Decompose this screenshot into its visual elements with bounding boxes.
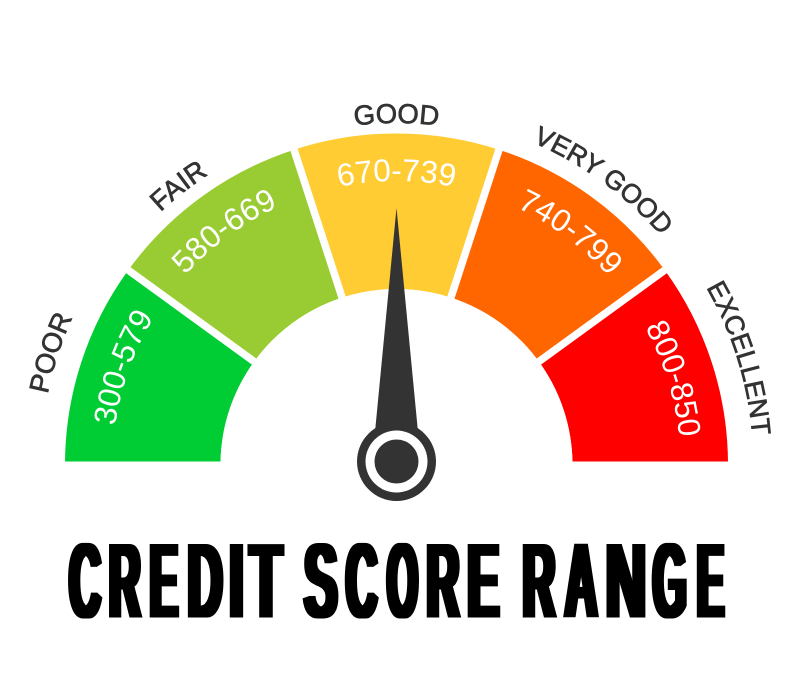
label: very good: VERY GOOD xyxy=(539,125,671,232)
text: E xyxy=(697,520,724,640)
gauge needle and hub xyxy=(357,208,436,501)
title: D xyxy=(188,520,222,640)
title xyxy=(69,520,724,640)
segment: fair, lime xyxy=(128,150,342,362)
range: 300-579: 300-579 xyxy=(94,310,150,424)
range labels on segments xyxy=(94,159,700,435)
title: R xyxy=(109,520,140,640)
title: C xyxy=(346,520,377,640)
segment: poor, green xyxy=(65,270,254,465)
range: 740-799: 740-799 xyxy=(522,188,621,272)
range: 800-850: 800-850 xyxy=(648,320,700,435)
label: poor: POOR xyxy=(29,313,72,392)
title: T xyxy=(250,520,282,640)
segment: excellent, red xyxy=(539,270,728,465)
range: 580-669: 580-669 xyxy=(171,190,274,272)
title: O xyxy=(387,520,418,640)
title: A xyxy=(565,520,597,640)
segment: good, yellow xyxy=(294,133,499,298)
title: G xyxy=(653,520,686,640)
title: E xyxy=(150,520,178,640)
title: S xyxy=(304,520,337,640)
title: R xyxy=(427,520,459,640)
label: fair: FAIR xyxy=(149,162,208,212)
range: 670-739: 670-739 xyxy=(338,159,455,186)
title: R xyxy=(523,520,555,640)
hub xyxy=(357,422,436,501)
gauge: colored arc segments xyxy=(65,134,728,462)
title: I xyxy=(229,520,244,640)
needle xyxy=(375,208,418,432)
title: C xyxy=(69,520,101,640)
title: N xyxy=(606,520,646,640)
segment: very good, orange xyxy=(451,150,665,362)
label: good: GOOD xyxy=(354,104,438,125)
title: E xyxy=(468,520,499,640)
category labels around gauge xyxy=(29,104,771,434)
label: excellent: EXCELLENT xyxy=(706,280,771,434)
